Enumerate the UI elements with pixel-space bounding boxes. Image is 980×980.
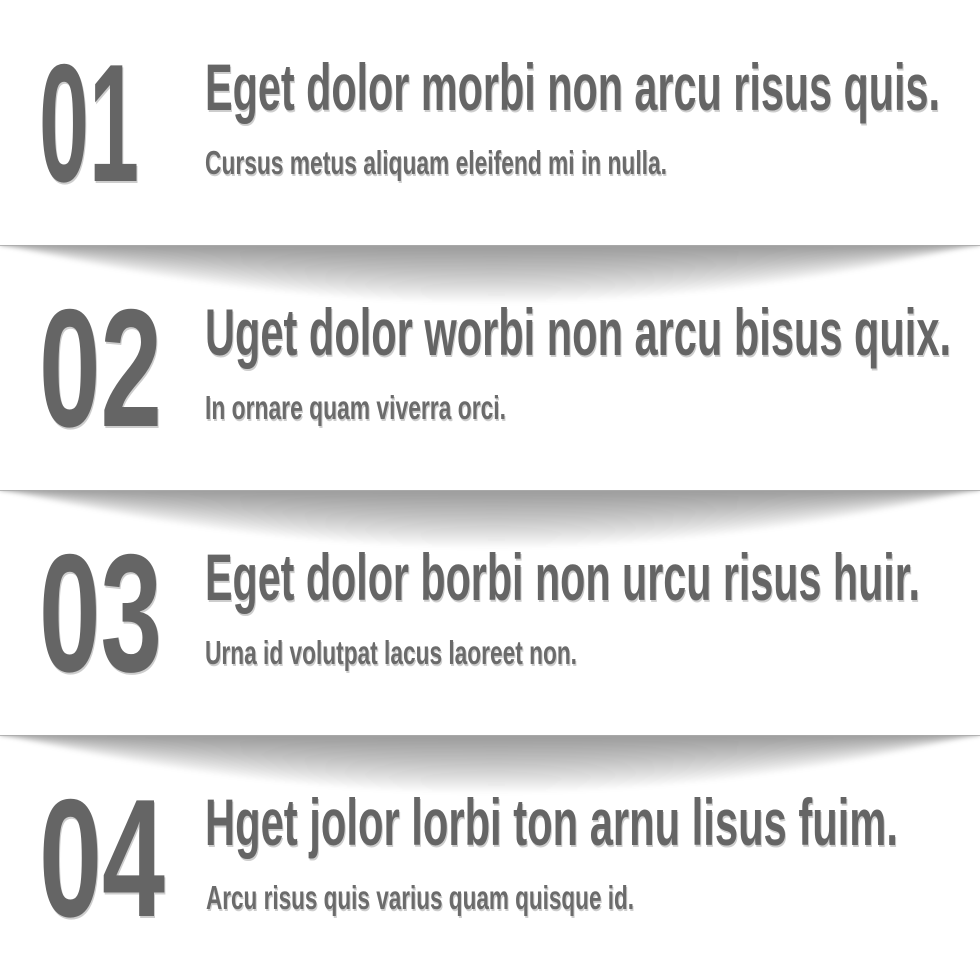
text 04: Arcu risus quis varius quam quisque id. xyxy=(206,879,634,916)
panel: item 02 xyxy=(39,274,951,462)
text 03: Urna id volutpat lacus laoreet non. xyxy=(205,634,577,671)
divider shadow 2 xyxy=(0,484,980,547)
number 04: 04 xyxy=(39,764,165,952)
number 02: 02 xyxy=(39,274,162,462)
divider shadow 1 xyxy=(0,239,980,302)
divider shadow 3 xyxy=(0,729,980,792)
panel: item 03 xyxy=(39,519,920,707)
panel: item 01 xyxy=(39,29,940,217)
text 02: In ornare quam viverra orci. xyxy=(205,389,506,426)
panel: item 04 xyxy=(39,764,898,952)
text 01: Cursus metus aliquam eleifend mi in nulla. xyxy=(205,144,667,181)
number 03: 03 xyxy=(39,519,162,707)
number 01: 01 xyxy=(39,29,139,217)
